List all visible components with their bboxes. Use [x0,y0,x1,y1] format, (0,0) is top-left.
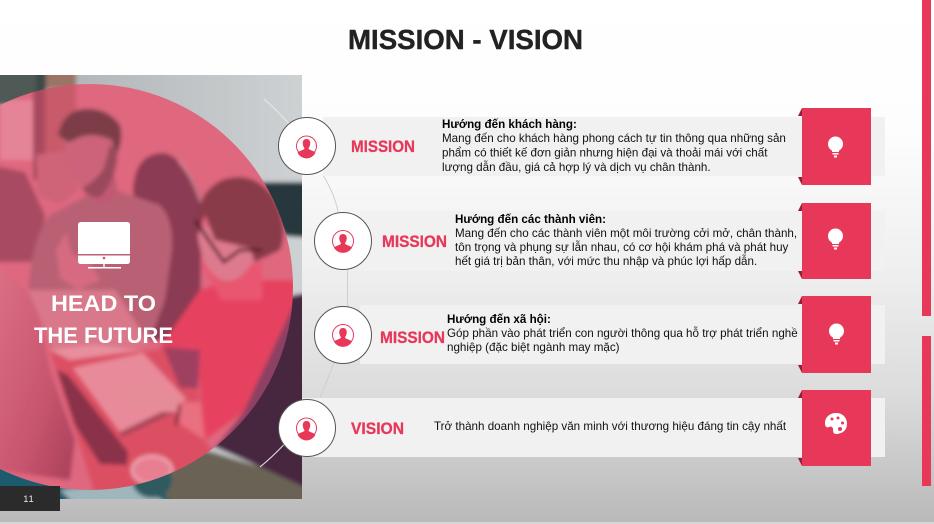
page number [0,486,60,511]
text block: Mang đến cho các thành viên một môi trường cởi mở, chân thành, [455,227,797,240]
text block [442,118,786,174]
heading: head to the future [34,222,173,348]
pink circle overlay scene [0,80,300,500]
title: MISSION - VISION [348,24,583,55]
icon: ribbon square with palette [798,390,871,466]
label: VISION [351,419,404,438]
icon: ribbon square with bulb [798,108,871,185]
panel: mission row 3 [314,296,885,373]
text block: nghiệp (đặc biệt ngành may mặc) [447,341,620,354]
heading: head to the future: HEAD TO [51,291,156,316]
text block: lượng dẫn đầu, giá cả hợp lý và dịch vụ chân thành. [442,161,711,174]
text block: Hướng đến khách hàng: [442,118,577,131]
text block [455,213,797,268]
connector arc over background [320,175,348,398]
label: MISSION [351,137,415,156]
panel: mission row 1 [278,108,885,185]
text block: Hướng đến xã hội: [447,313,551,326]
photo background outside circle [0,70,310,505]
text block: Góp phần vào phát triển con người thông qua hỗ trợ phát triển nghề [447,327,798,340]
heading: head to the future: THE FUTURE [34,323,173,348]
icon: ribbon square with bulb [798,203,871,279]
icon: person badge [314,212,372,270]
icon: person badge [278,118,336,174]
label: MISSION [380,328,445,347]
text block: phẩm có thiết kế đơn giản nhưng hiện đại và thoải mái với chất [442,146,768,160]
icon: person badge [278,400,336,456]
icon: person badge [314,306,372,364]
text block: Trở thành doanh nghiệp văn minh với thương hiệu đáng tin cậy nhất [434,420,787,433]
panel: photo with pink circle [0,75,302,499]
bottom edge band [0,522,934,524]
text block [447,313,798,354]
text block: Mang đến cho khách hàng phong cách tự tin thông qua những sản [442,132,786,145]
text block: Hướng đến các thành viên: [455,213,606,226]
page number: 11 [23,494,35,504]
connector arc over photo [260,98,289,468]
panel: vision row [278,390,885,466]
text block: hết giá trị bản thân, với mức thu nhập và phúc lợi hấp dẫn. [455,255,757,268]
panel: mission row 2 [314,203,885,279]
label: MISSION [382,232,447,251]
right accent bars [922,0,931,486]
icon: monitor [78,222,130,268]
text block: tôn trọng và phụng sự lẫn nhau, có cơ hội khám phá và phát huy [455,241,789,254]
icon: ribbon square with bulb [798,296,871,373]
